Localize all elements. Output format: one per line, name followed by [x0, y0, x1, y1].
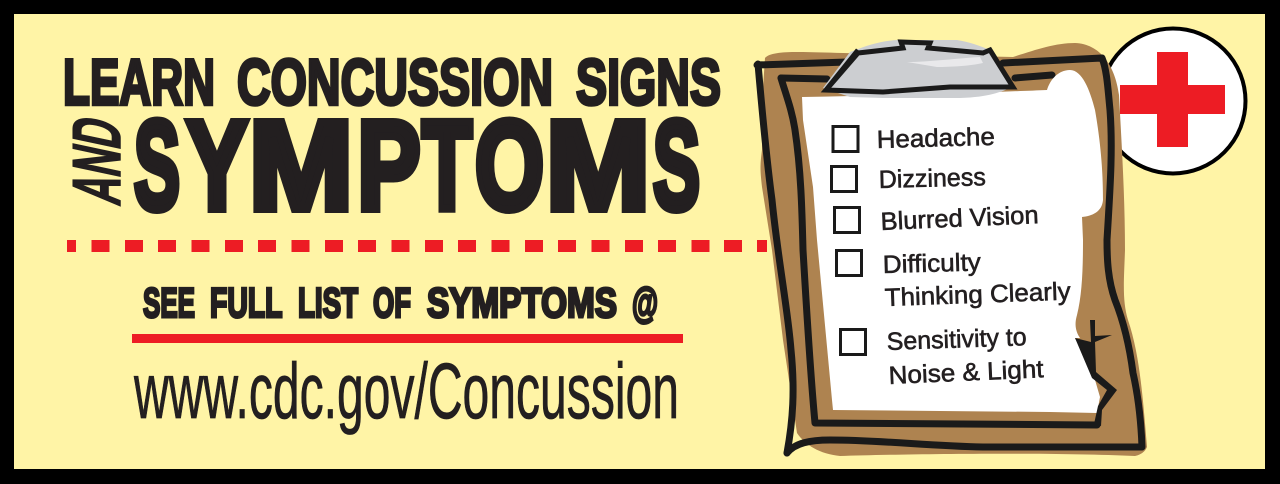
symptom: noise and light: Noise & Light — [888, 355, 1044, 390]
page curl — [1075, 320, 1117, 426]
symptom: blurred vision: Blurred Vision — [880, 201, 1039, 236]
clipboard — [757, 40, 1147, 456]
heading: symptoms: M — [249, 95, 353, 236]
checkbox: dizziness — [832, 166, 856, 192]
symptom: difficulty: Difficulty — [882, 248, 982, 279]
see full list text: OF — [373, 279, 411, 326]
heading: learn concussion signs: SIGNS — [576, 46, 721, 118]
clip body — [823, 40, 1013, 98]
heading: symptoms: Y — [186, 95, 248, 236]
dashed red divider — [67, 240, 767, 252]
see full list text: FULL — [210, 279, 282, 326]
heading: symptoms: P — [358, 95, 420, 236]
checklist — [832, 126, 866, 354]
outer outline — [757, 58, 1142, 453]
checkbox: blurred vision — [834, 208, 860, 232]
heading: learn concussion signs: LEARN — [63, 46, 215, 118]
url: www.cdc.gov/Concussion — [133, 346, 679, 435]
clipboard board — [760, 43, 1147, 456]
red rule — [132, 334, 683, 343]
checkbox: sensitivity — [840, 330, 866, 354]
heading: symptoms: O — [475, 95, 544, 236]
symptom: thinking clearly: Thinking Clearly — [884, 278, 1072, 312]
checkbox: headache — [833, 126, 858, 152]
heading: symptoms: S — [134, 95, 180, 236]
metal clip — [823, 40, 1013, 98]
first aid badge — [1100, 28, 1246, 174]
heading: symptoms: M — [546, 95, 650, 236]
heading: learn concussion signs: CONCUSSION — [237, 46, 553, 118]
see full list text: @ — [632, 279, 658, 326]
red cross — [1120, 52, 1225, 147]
heading: symptoms: S — [653, 95, 700, 236]
symptom: dizziness: Dizziness — [878, 163, 986, 194]
heading: symptoms: T — [422, 95, 472, 236]
checkbox: difficulty thinking — [836, 250, 862, 276]
symptom: headache: Headache — [876, 123, 995, 154]
see full list text: SYMPTOMS — [427, 279, 617, 326]
badge circle — [1100, 28, 1246, 174]
heading: and: AND — [59, 110, 135, 210]
symptom: sensitivity to: Sensitivity to — [886, 323, 1027, 356]
see full list text: SEE — [143, 279, 195, 326]
clip highlight — [907, 57, 983, 67]
see full list text: LIST — [298, 279, 358, 326]
paper — [802, 70, 1103, 413]
clip outline — [826, 42, 1013, 92]
